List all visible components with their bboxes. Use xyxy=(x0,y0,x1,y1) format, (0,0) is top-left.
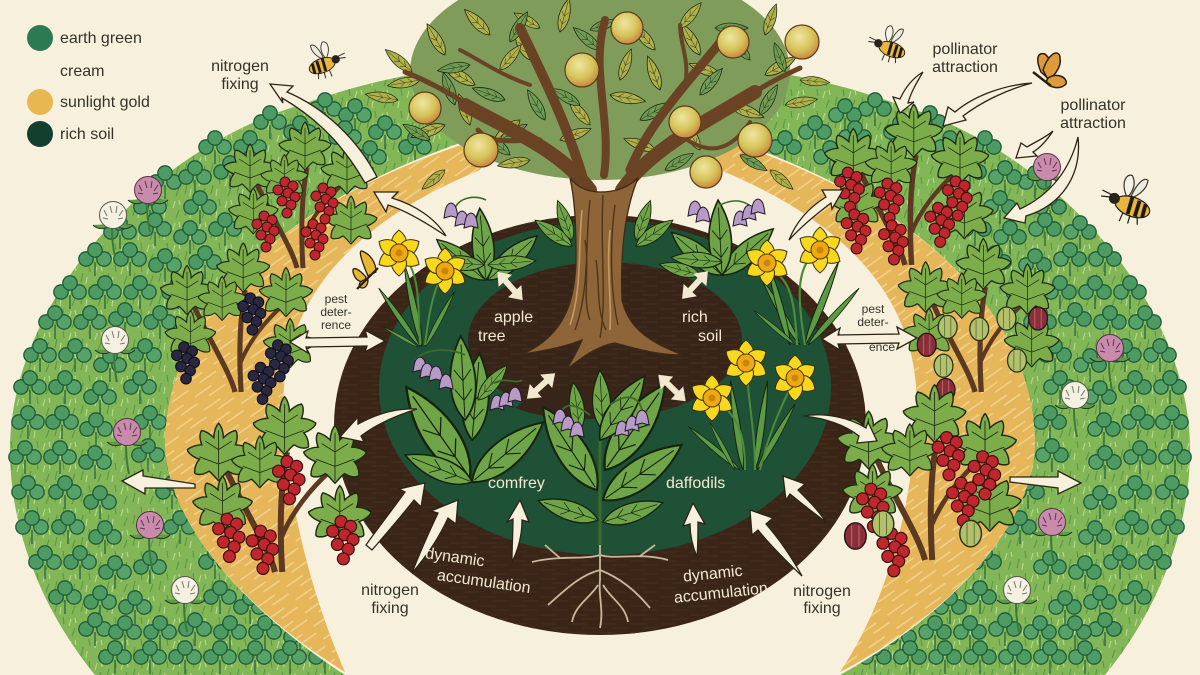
arrow: daffodils to gold ring, upper right xyxy=(789,190,843,240)
arrow: gold to outer ring, left xyxy=(122,470,195,494)
label: pollinator attraction 1: pollinator xyxy=(933,41,998,58)
label: dynamic accumulation, right: accumulation xyxy=(673,580,769,607)
label: nitrogen fixing, top left: nitrogen xyxy=(211,58,269,75)
arrow: nitrogen fixing 1, lower left xyxy=(366,483,425,550)
label: pest deterrence, left: deter- xyxy=(320,305,352,319)
label: nitrogen fixing, lower right: fixing xyxy=(803,600,841,617)
legend: sunlight gold: sunlight gold xyxy=(60,94,150,111)
bee, top left xyxy=(307,42,346,79)
redcurrant shrub, upper left xyxy=(224,122,377,268)
sunlight gold ring, right xyxy=(700,133,1035,672)
label: rich soil: soil xyxy=(698,328,722,345)
arrow: butterfly to shrub xyxy=(943,83,1032,126)
arrow: pest deterrence, left xyxy=(290,330,385,353)
arrow: pollinator attraction 1 xyxy=(893,72,923,113)
arrow: nitrogen fixing 2, lower right xyxy=(750,510,802,576)
earth green inner ellipse xyxy=(379,221,831,555)
label: pest deterrence, left: pest xyxy=(325,292,348,306)
apple tree xyxy=(365,0,830,369)
arrow: comfrey to gold ring, upper left xyxy=(374,192,446,236)
legend: earth green: earth green xyxy=(60,30,142,47)
daffodils, lower centre right xyxy=(687,340,819,472)
label: pollinator attraction 2: pollinator xyxy=(1061,97,1126,114)
redcurrant shrub, lower left xyxy=(187,397,371,574)
comfrey, large left xyxy=(393,335,552,493)
arrow: nitrogen fixing 1, lower right xyxy=(783,476,826,522)
label: apple tree: tree xyxy=(478,328,506,345)
label: nitrogen fixing, top left: fixing xyxy=(221,76,259,93)
redcurrant shrub, upper right xyxy=(825,104,993,265)
clover field left xyxy=(9,93,431,674)
label: pollinator attraction 2: attraction xyxy=(1060,115,1126,132)
label: pest deterrence, left: rence xyxy=(321,318,351,332)
comfrey behind trunk xyxy=(531,198,677,252)
canopy wash xyxy=(410,0,790,180)
legend xyxy=(27,25,150,147)
label: pest deterrence, right: deter- xyxy=(857,315,889,329)
tree soil patch xyxy=(468,262,742,419)
label: comfrey: comfrey xyxy=(488,475,545,492)
clover blossoms xyxy=(93,154,1130,632)
comfrey roots xyxy=(532,535,668,628)
label: dynamic accumulation, left: dynamic xyxy=(424,545,486,570)
daffodils, upper right xyxy=(743,227,861,347)
mixed berry shrub, lower right xyxy=(837,385,1021,577)
bee, top right xyxy=(868,26,907,63)
inner exchange arrows xyxy=(491,265,715,408)
arrow: to nitrogen fixing, top left xyxy=(270,84,377,183)
label: daffodils: daffodils xyxy=(666,475,725,492)
label: nitrogen fixing, lower left: fixing xyxy=(371,600,409,617)
inner cream garden area xyxy=(165,130,1035,675)
arrow: gold to outer ring, right xyxy=(1010,471,1081,494)
arrow: comfrey to lower left shrub xyxy=(340,409,417,442)
arrow: dynamic accumulation, left xyxy=(507,500,529,562)
arrow: pest deterrence, right xyxy=(822,327,917,350)
label: pest deterrence, right: ence xyxy=(869,340,895,354)
butterfly, orange xyxy=(1033,53,1066,88)
bee, far right xyxy=(1101,175,1153,225)
label: rich soil: rich xyxy=(682,309,708,326)
blackcurrant shrub, left xyxy=(161,243,317,404)
label: pollinator attraction 1: attraction xyxy=(932,59,998,76)
butterfly, yellow xyxy=(353,251,378,289)
clover field right xyxy=(769,93,1191,674)
label: nitrogen fixing, lower left: nitrogen xyxy=(361,582,419,599)
daffodils, upper left xyxy=(375,230,469,349)
canopy leaves, olive xyxy=(365,0,830,193)
arrow: dynamic accumulation, right xyxy=(683,503,705,557)
label: dynamic accumulation, left: accumulation xyxy=(436,567,532,597)
apples xyxy=(409,12,819,188)
rich soil outer ellipse xyxy=(334,215,866,635)
arrow: pollinator attraction 3 xyxy=(1004,137,1079,223)
branches xyxy=(405,20,800,190)
label: dynamic accumulation, right: dynamic xyxy=(682,563,743,586)
label: apple tree: apple xyxy=(494,309,533,326)
sunlight gold ring, left xyxy=(165,133,500,672)
label: nitrogen fixing, lower right: nitrogen xyxy=(793,583,851,600)
label: pest deterrence, right: pest xyxy=(862,302,885,316)
comfrey, upper right xyxy=(658,199,780,283)
arrow: pollinator attraction 2 xyxy=(1016,131,1053,158)
comfrey, upper left xyxy=(431,197,544,287)
trunk xyxy=(523,178,682,369)
arrows xyxy=(122,72,1081,576)
comfrey, centre with roots xyxy=(531,369,690,628)
comfrey leaves xyxy=(531,369,690,545)
arrow: daffodils to lower right shrub xyxy=(803,415,877,443)
canopy leaves, green xyxy=(401,9,789,175)
gooseberry shrub, right xyxy=(898,239,1059,401)
legend: cream: cream xyxy=(60,63,104,80)
arrow: nitrogen fixing 2, lower left xyxy=(412,500,458,573)
legend: rich soil: rich soil xyxy=(60,126,114,143)
